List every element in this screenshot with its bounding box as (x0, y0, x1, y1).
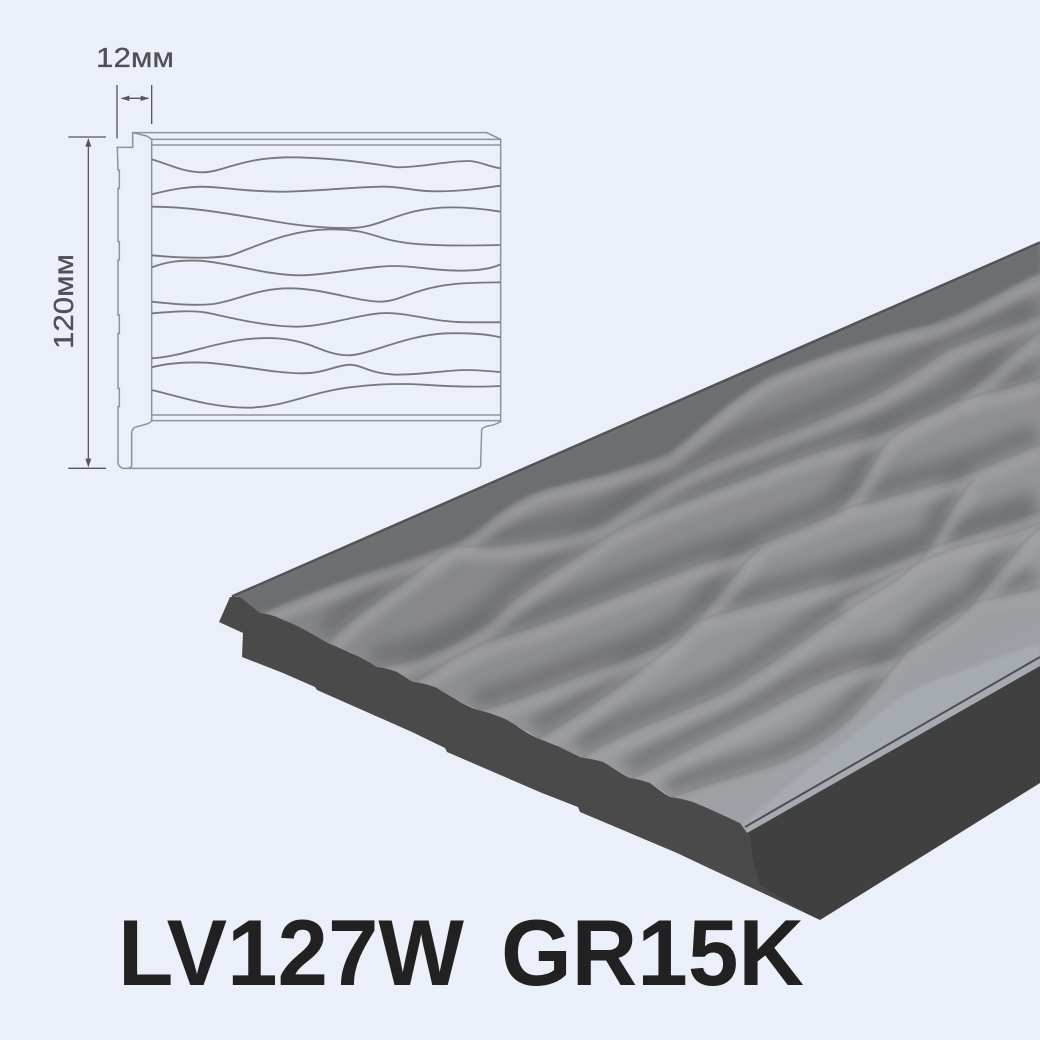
colour code: GR15K (501, 900, 804, 1005)
top flat band (232, 243, 1040, 613)
dimension lines (68, 85, 152, 468)
bottom flat strip (742, 643, 1040, 836)
title (118, 900, 804, 1005)
profile outline (117, 133, 501, 468)
panel front scalloped edge (219, 597, 806, 913)
dimension label: width: 12мм (96, 42, 174, 73)
panel right side face (740, 666, 1040, 920)
bottom groove line (745, 657, 1040, 827)
dimension label: height: 120мм (48, 254, 79, 349)
model code: LV127W (118, 900, 464, 1005)
profile drawing (68, 85, 501, 468)
3D wave panel (219, 235, 1040, 920)
arrowheads (85, 96, 149, 467)
top edge line (232, 242, 1040, 596)
profile wave lines (152, 157, 501, 408)
wave highlights (263, 281, 1040, 806)
panel wave face (220, 235, 1040, 845)
wave shadows (318, 296, 1040, 796)
wave creases (416, 393, 1039, 797)
